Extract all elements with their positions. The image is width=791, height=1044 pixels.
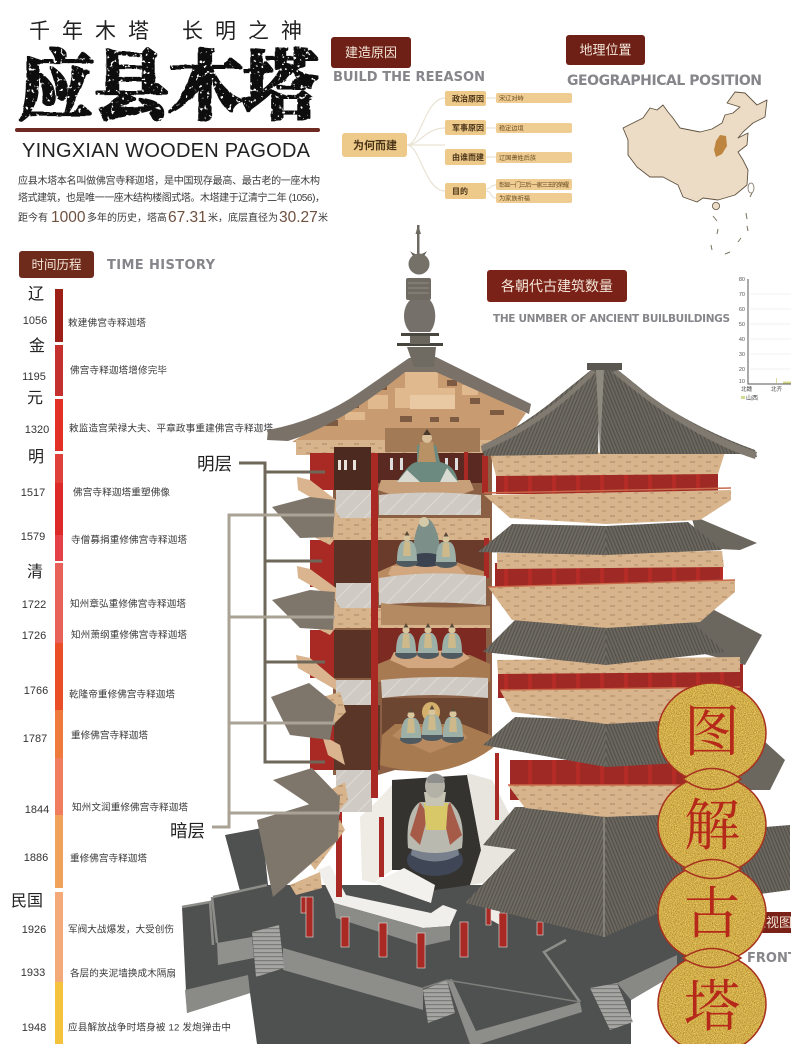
intro paragraph: 米 bbox=[318, 211, 328, 224]
gold medallions with title bbox=[658, 683, 766, 1044]
timeline years: 1933 bbox=[21, 967, 45, 979]
bar chart fragment: 北齐 bbox=[771, 385, 783, 393]
main title: 应县木塔 bbox=[18, 26, 318, 135]
mind map: why built: 军事原因 bbox=[452, 122, 484, 132]
upper bracket band bbox=[296, 440, 500, 455]
right inner wall bbox=[467, 773, 515, 885]
partially hidden front view header: 正视图 bbox=[753, 915, 791, 930]
medallion: 解: 解 bbox=[684, 782, 740, 862]
bar chart fragment: 80 bbox=[739, 277, 745, 283]
timeline events bbox=[68, 317, 273, 1034]
balcony and bracket clusters bbox=[290, 477, 348, 895]
top storey bbox=[484, 452, 731, 524]
section header: geographic position bbox=[566, 35, 762, 89]
tagline: 千年木塔 bbox=[29, 20, 161, 43]
title rule bbox=[15, 128, 320, 132]
section header: build reason: BUILD THE REEASON bbox=[333, 70, 485, 85]
outer white band bbox=[318, 865, 457, 928]
timeline events: 军阀大战爆发，大受创伤 bbox=[68, 924, 174, 936]
intro paragraph: 30.27 bbox=[279, 209, 318, 226]
intro paragraph: 应县木塔本名叫做佛宫寺释迦塔，是中国现存最高、最古老的一座木构 bbox=[18, 174, 320, 187]
timeline dynasties bbox=[11, 285, 45, 910]
platform side walls bbox=[185, 975, 250, 1013]
label: light storey: 明层 bbox=[197, 454, 232, 474]
mind map: why built: 为何而建 bbox=[353, 138, 397, 152]
mind map: why built: 宋辽对峙 bbox=[499, 94, 524, 102]
white core wall and inner chamber bbox=[318, 773, 515, 946]
mind map: why built: 为家族祈福 bbox=[499, 194, 530, 202]
intro paragraph: 塔式建筑，也是唯一一座木结构楼阁式塔。木塔建于辽清宁二年 (1056)， bbox=[18, 191, 325, 204]
top roof left and right slopes bbox=[267, 357, 531, 441]
first floor plaster walls bbox=[336, 490, 372, 530]
timeline years: 1766 bbox=[24, 685, 48, 697]
section header: geographic position: GEOGRAPHICAL POSITION bbox=[567, 73, 762, 89]
mind map: why built: 目的 bbox=[452, 186, 468, 196]
bar chart fragment: 50 bbox=[739, 322, 745, 328]
bar chart fragment: 20 bbox=[739, 367, 745, 373]
bar chart fragment: 30 bbox=[739, 352, 745, 358]
intro paragraph: 67.31 bbox=[168, 209, 207, 226]
intro paragraph: 多年的历史，塔高 bbox=[87, 211, 167, 224]
mind map: why built: 稳定边境 bbox=[499, 124, 524, 132]
timeline events: 敕建佛宫寺释迦塔 bbox=[68, 317, 146, 329]
second floor plaster walls bbox=[336, 583, 372, 628]
timeline dynasties: 元 bbox=[27, 390, 43, 407]
section header: time history: 时间历程 bbox=[31, 257, 82, 272]
section header: build reason bbox=[331, 37, 485, 85]
timeline events: 知州文润重修佛宫寺释迦塔 bbox=[72, 802, 188, 814]
timeline events: 乾隆帝重修佛宫寺释迦塔 bbox=[69, 688, 175, 700]
timeline events: 知州章弘重修佛宫寺释迦塔 bbox=[70, 598, 186, 610]
intro paragraph: 米，底层直径为 bbox=[208, 211, 278, 224]
bar chart fragment: 山西 bbox=[746, 394, 758, 402]
timeline events: 应县解放战争时塔身被 12 发炮弹击中 bbox=[68, 1022, 231, 1034]
attic timber framing bbox=[292, 362, 526, 450]
bar chart fragment: 60 bbox=[739, 307, 745, 313]
timeline dynasties: 明 bbox=[28, 449, 44, 466]
bar chart fragment: 10 bbox=[739, 379, 745, 385]
second floor Buddha group bbox=[396, 517, 457, 568]
front plinth bbox=[374, 868, 435, 903]
section header: time history bbox=[19, 251, 216, 278]
timeline years: 1195 bbox=[22, 371, 46, 383]
timeline dynasties: 清 bbox=[27, 563, 43, 581]
first floor Buddha bbox=[397, 429, 458, 482]
timeline years: 1056 bbox=[23, 315, 47, 327]
timeline events: 敕监造宫荣禄大夫、平章政事重建佛宫寺释迦塔 bbox=[69, 422, 273, 434]
medallion: 图 bbox=[658, 683, 766, 783]
medallion: 解 bbox=[658, 776, 766, 874]
title block bbox=[15, 20, 320, 162]
exterior half of the pagoda bbox=[465, 363, 790, 937]
mind map: why built: 辽国萧姓后族 bbox=[499, 154, 536, 162]
left eave stubs bbox=[257, 497, 340, 897]
intro paragraph: 1000 bbox=[51, 209, 86, 226]
mind map: why built bbox=[342, 91, 572, 203]
second floor bbox=[310, 518, 490, 592]
leader lines for light storeys bbox=[197, 454, 325, 762]
medallion: 古 bbox=[658, 864, 766, 962]
timeline dynasties: 民国 bbox=[11, 893, 43, 910]
medallion: 塔: 塔 bbox=[684, 963, 740, 1043]
left inner wall bbox=[360, 785, 392, 883]
lens connectors between medallions bbox=[683, 768, 741, 968]
timeline years: 1926 bbox=[22, 924, 46, 936]
fourth floor bbox=[310, 698, 500, 772]
mind map: why built: 由谁而建 bbox=[452, 152, 484, 162]
bar chart fragment: 北魏 bbox=[741, 385, 753, 393]
timeline events: 寺僧募捐重修佛宫寺释迦塔 bbox=[71, 534, 187, 546]
section header: time history: TIME HISTORY bbox=[107, 258, 216, 273]
timeline years: 1579 bbox=[21, 531, 45, 543]
timeline dynasties: 辽 bbox=[28, 285, 44, 303]
section header: geographic position: 地理位置 bbox=[579, 42, 632, 58]
section header: number of ancient buildings: THE UNMBER OF ANCIENT BUILBUILDINGS bbox=[493, 313, 730, 325]
medallion: 古: 古 bbox=[684, 870, 740, 950]
timeline events: 各层的夹泥墙换成木隔扇 bbox=[70, 968, 176, 980]
timeline events: 知州萧纲重修佛宫寺释迦塔 bbox=[71, 629, 187, 641]
section header: build reason: 建造原因 bbox=[345, 45, 397, 60]
mind map: why built: 彰显一门三后 一家三王的荣耀 bbox=[499, 181, 569, 189]
timeline years: 1886 bbox=[24, 852, 48, 864]
timeline years: 1787 bbox=[23, 733, 47, 745]
timeline events: 重修佛宫寺释迦塔 bbox=[71, 730, 148, 742]
timeline events: 重修佛宫寺释迦塔 bbox=[70, 852, 147, 864]
base level red columns bbox=[301, 897, 543, 968]
top roof bbox=[481, 363, 757, 459]
tagline second part: 长明之神 bbox=[182, 20, 314, 43]
third floor plaster walls bbox=[336, 680, 372, 722]
fourth level storey bbox=[483, 710, 785, 817]
map of China with Shanxi highlighted bbox=[623, 92, 767, 254]
fourth floor Buddha group bbox=[400, 702, 464, 744]
third floor Buddha group bbox=[395, 623, 463, 659]
english title: YINGXIAN WOODEN PAGODA bbox=[22, 140, 311, 162]
medallion: 塔 bbox=[658, 954, 766, 1044]
timeline years: 1722 bbox=[22, 599, 46, 611]
bar chart fragment: 70 bbox=[739, 292, 745, 298]
second level storey bbox=[478, 515, 757, 628]
timeline years: 1844 bbox=[25, 804, 49, 816]
timeline bar bbox=[55, 289, 63, 1044]
timeline years: 1726 bbox=[22, 630, 46, 642]
bar chart fragment bbox=[739, 277, 791, 402]
interior backdrop bbox=[333, 440, 492, 775]
label: dark storey: 暗层 bbox=[170, 821, 205, 841]
timeline years: 1517 bbox=[21, 487, 45, 499]
intro paragraph bbox=[18, 174, 328, 226]
fifth level double roof bbox=[465, 807, 790, 937]
platform top bbox=[182, 828, 690, 1044]
section header: number of ancient buildings bbox=[487, 270, 730, 325]
timeline years: 1320 bbox=[25, 424, 49, 436]
timeline years: 1948 bbox=[22, 1022, 46, 1034]
fourth floor plaster walls bbox=[336, 770, 372, 812]
large seated Buddha bbox=[407, 774, 463, 876]
timeline years bbox=[21, 315, 49, 1034]
dark chamber bbox=[392, 775, 482, 890]
timeline events: 佛宫寺释迦塔重塑佛像 bbox=[73, 486, 170, 498]
spire bbox=[397, 225, 443, 367]
section header: number of ancient buildings: 各朝代古建筑数量 bbox=[501, 278, 613, 294]
red structural columns bbox=[336, 453, 499, 897]
third floor bbox=[310, 603, 490, 682]
mind map: why built: 政治原因 bbox=[452, 94, 484, 104]
left cutaway section of the pagoda bbox=[257, 357, 531, 897]
bar chart fragment: 40 bbox=[739, 337, 745, 343]
stone platform base bbox=[182, 828, 690, 1044]
medallion: 图: 图 bbox=[684, 688, 740, 768]
leader lines for dark storeys bbox=[170, 515, 340, 841]
timeline dynasties: 金 bbox=[29, 337, 45, 355]
first floor bbox=[310, 447, 488, 495]
third level storey bbox=[483, 600, 762, 724]
intro paragraph: 距今有 bbox=[18, 211, 48, 224]
platform stairs bbox=[252, 925, 284, 977]
partially hidden front view header bbox=[740, 912, 791, 966]
timeline events: 佛宫寺释迦塔增修完毕 bbox=[70, 364, 167, 376]
